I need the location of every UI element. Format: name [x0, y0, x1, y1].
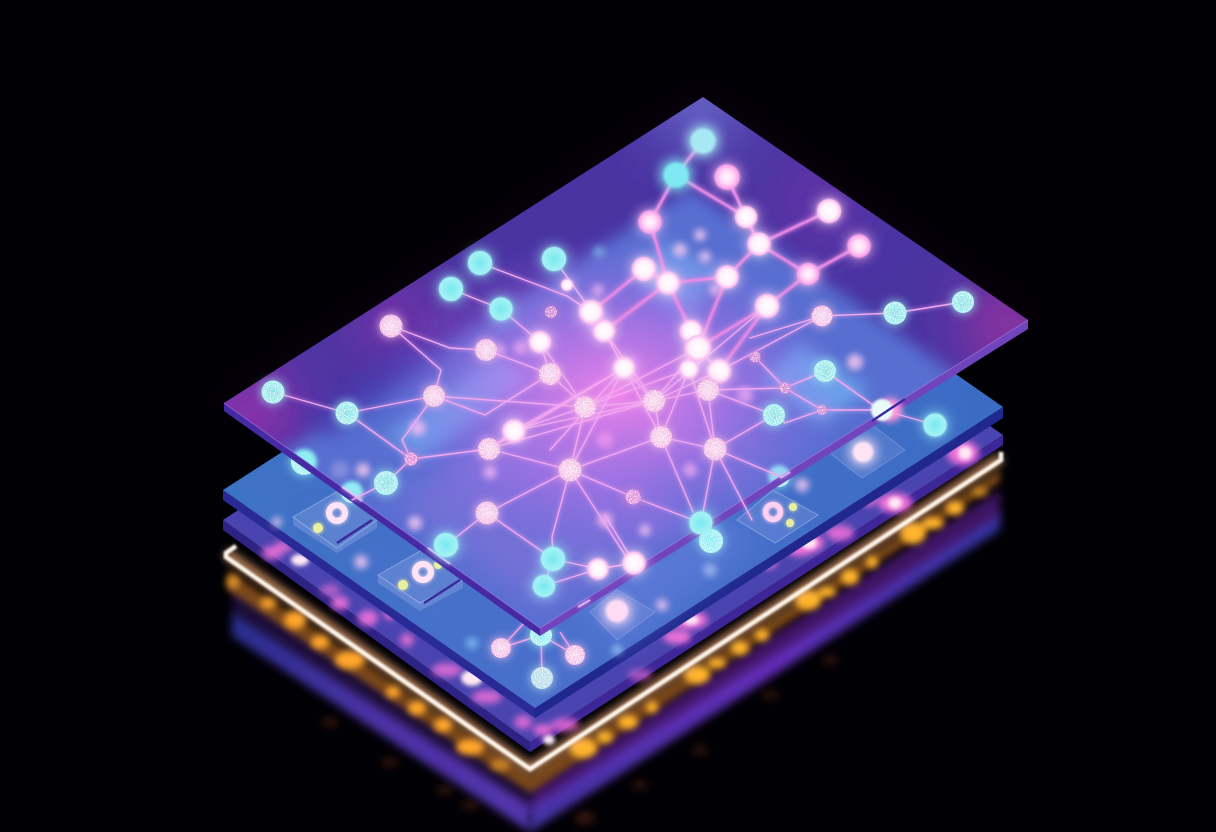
purple chip layer: [223, 215, 1003, 752]
orange light strip layer: [226, 470, 1000, 793]
bottom reflection: purple layer: [232, 490, 1000, 832]
frosted out-of-focus lights: [310, 229, 863, 536]
top glass plate: [224, 97, 1028, 676]
ambient magenta glow behind top plate: [224, 97, 1028, 403]
chip 1: [293, 490, 377, 553]
lower network nodes: [291, 449, 790, 689]
central pink glow: [400, 249, 822, 535]
right orange lights: [569, 487, 988, 758]
light streaks on plate edge: [342, 404, 895, 607]
network nodes: blurred top cyan: [664, 128, 716, 188]
frosted view of lower nodes: [291, 449, 790, 503]
network nodes: cyan: [262, 291, 974, 495]
lighter frosted bands: [385, 240, 870, 460]
network nodes: smooth cyan: [434, 247, 946, 597]
illustration: stacked glass layers with neural network: [218, 92, 1028, 832]
chip 3: [737, 490, 818, 543]
left orange lights: [226, 575, 510, 771]
blurred out-of-focus lights on blue layer: [272, 478, 809, 655]
lower network lines on blue layer: [501, 586, 575, 678]
chip 4: [830, 425, 905, 478]
network connections: fine lines: [273, 259, 963, 586]
network nodes: speckled pink: [380, 306, 832, 524]
network connections: upper soft lines: [591, 141, 859, 371]
purple layer white lights: [291, 446, 972, 745]
plate corner tints: [224, 97, 1028, 450]
bottom reflection: faint orange lights: [322, 656, 838, 824]
glowing white frame line: [226, 452, 1001, 769]
chip 5: [590, 590, 655, 640]
split node on plate edge: [871, 398, 905, 422]
lilac tint in lower glass: [398, 447, 687, 610]
dark band at top-left of blue: [313, 346, 457, 442]
chips on blue layer: [293, 425, 905, 640]
plate interior lighting: [224, 97, 1028, 628]
blue glass layer: [223, 189, 1003, 718]
chip 2: [378, 550, 463, 611]
network nodes: bright pink: [502, 164, 870, 580]
frosted view of blue layer: [282, 188, 956, 628]
purple layer pink lights: [262, 441, 979, 736]
